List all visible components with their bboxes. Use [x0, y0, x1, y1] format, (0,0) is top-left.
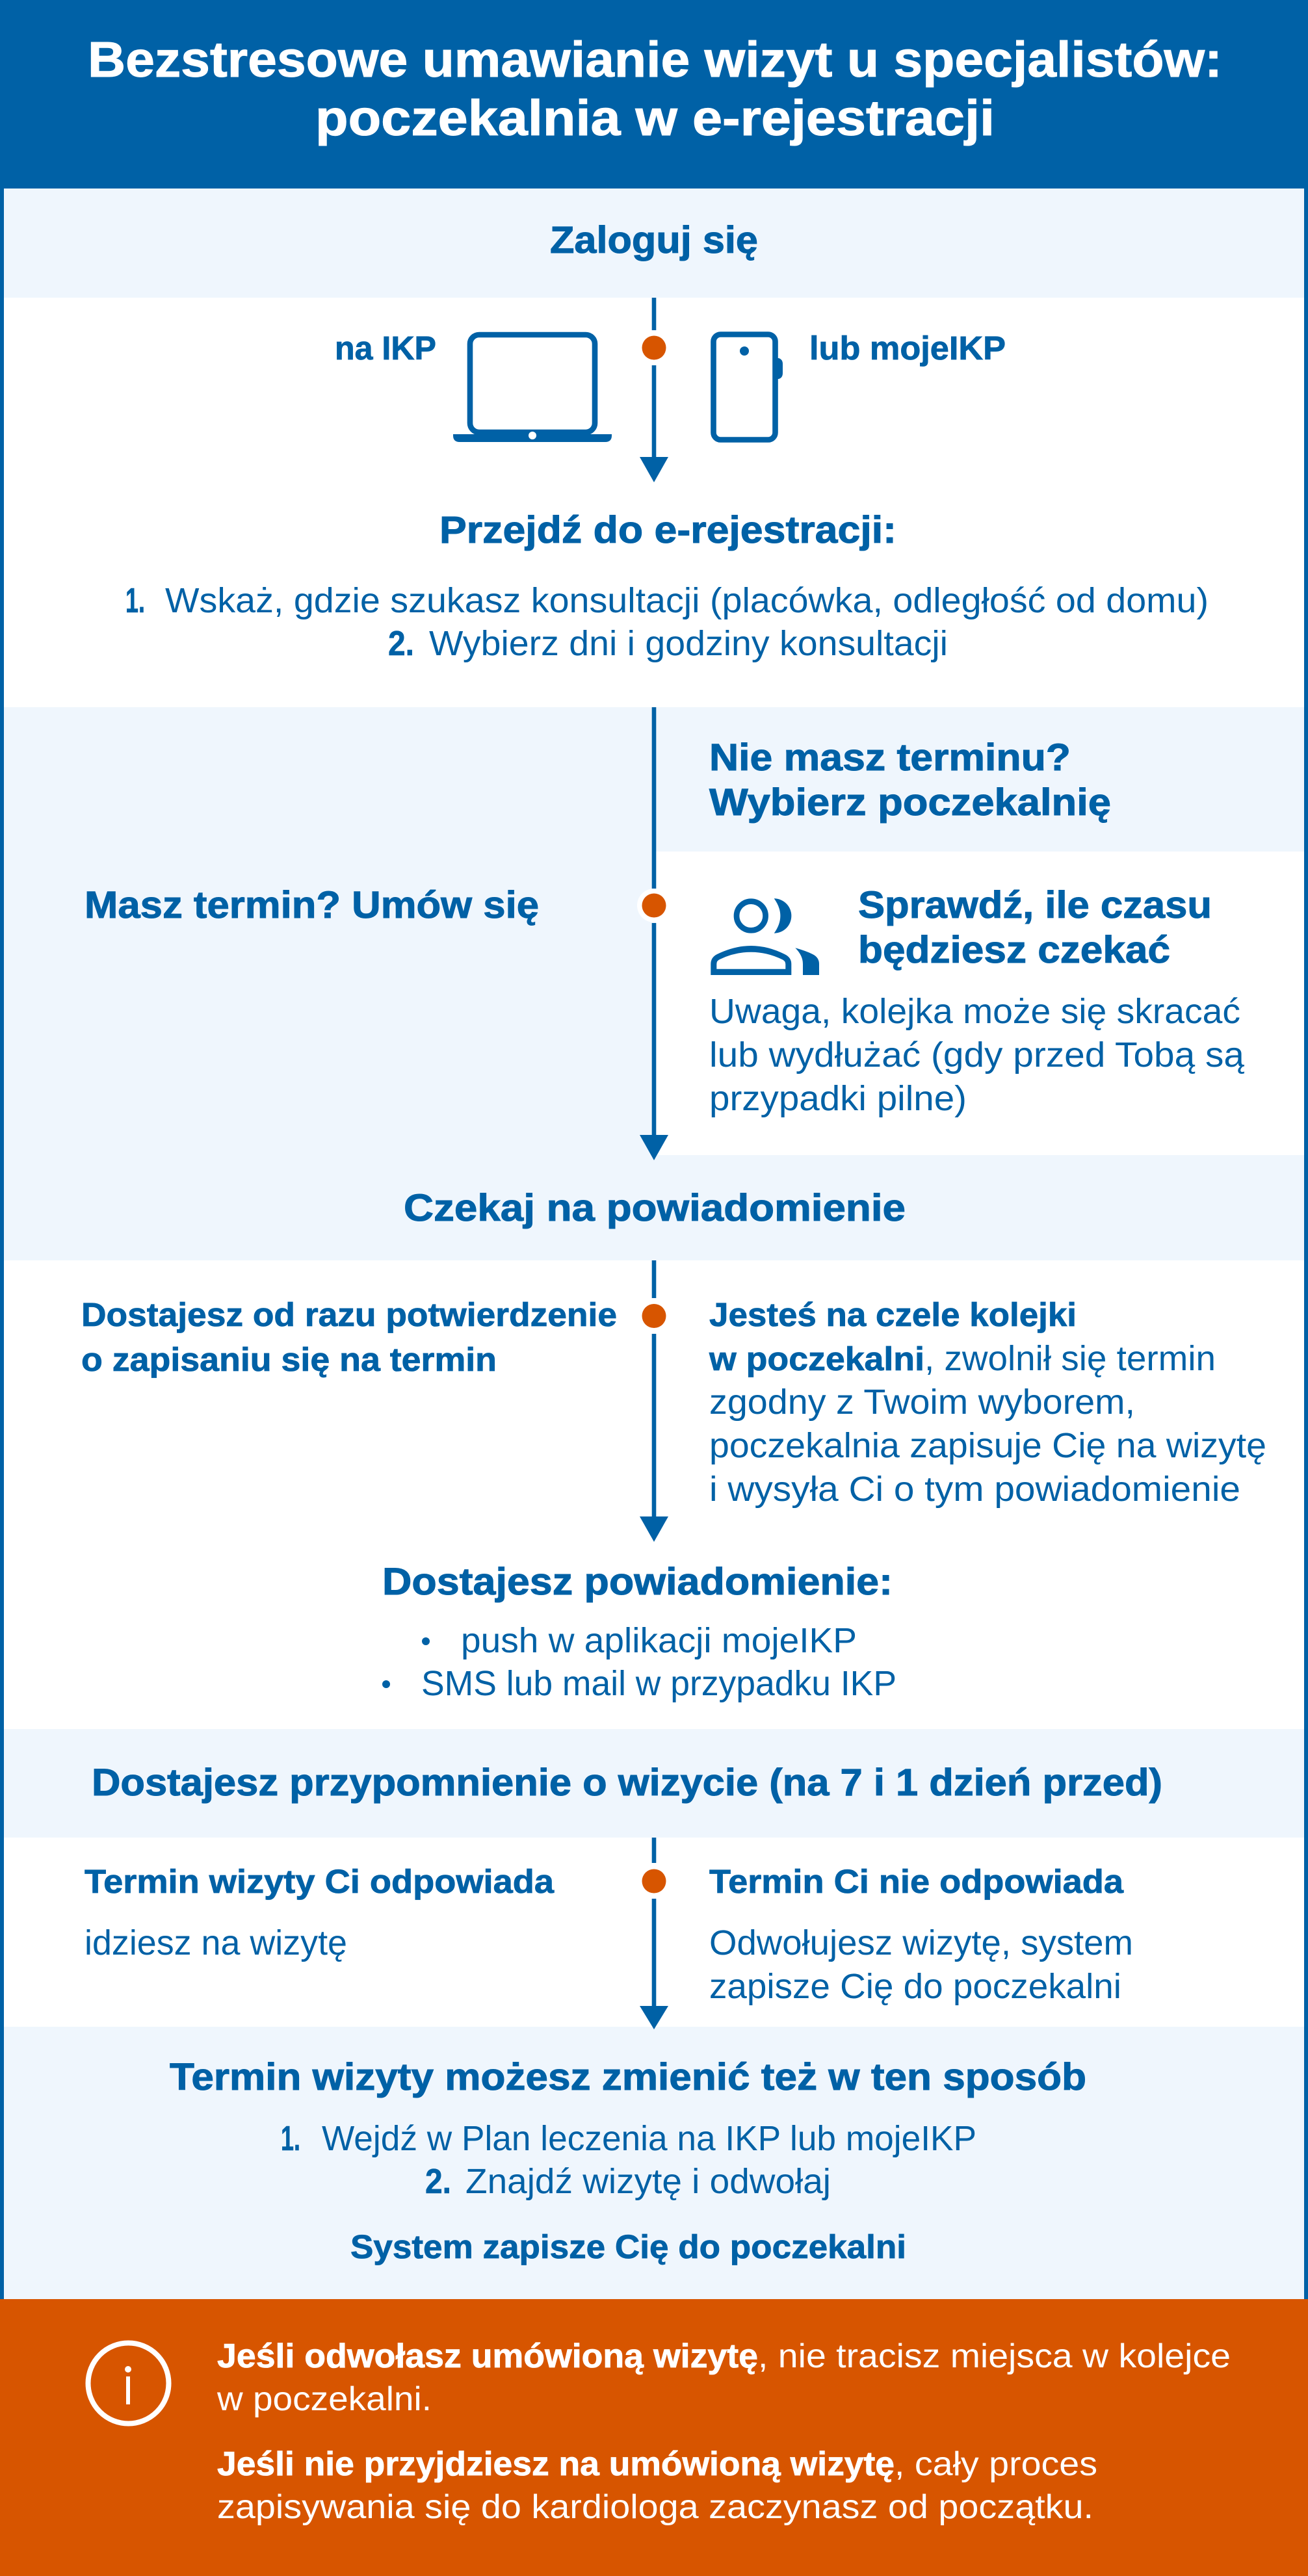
heading: wait for notification: Czekaj na powiadomienie	[404, 1187, 906, 1229]
label: na IKP: na IKP	[335, 330, 436, 367]
numbered list: change steps: Wejdź w Plan leczenia na IKP lub mojeIKP	[322, 2119, 976, 2158]
text: top of queue: w poczekalni	[709, 1340, 924, 1377]
heading: go to e-registration: Przejdź do e-rejestracji:	[439, 509, 896, 551]
text: top of queue: zgodny z Twoim wyborem,	[709, 1383, 1135, 1422]
heading: check waiting time: będziesz czekać	[858, 929, 1170, 971]
label: lub mojeIKP: lub mojeIKP	[809, 330, 1006, 367]
heading: log in: Zaloguj się	[550, 219, 758, 261]
panel: warning	[0, 2299, 1308, 2576]
text: cancelling: , nie tracisz miejsca w kolejce	[758, 2337, 1231, 2375]
text: immediate confirmation	[81, 1296, 617, 1378]
text: not showing up: , cały proces	[895, 2445, 1097, 2483]
flow connector 4	[640, 1838, 668, 2029]
text: immediate confirmation: o zapisaniu się na termin	[81, 1341, 497, 1378]
text: queue note: lub wydłużać (gdy przed Tobą są	[709, 1035, 1245, 1074]
text: top of queue	[709, 1296, 1266, 1509]
numbered list: change steps: 2.	[425, 2162, 451, 2201]
numbered list: registration steps: Wybierz dni i godziny konsultacji	[429, 624, 948, 663]
heading: reminder: Dostajesz przypomnienie o wizycie (na 7 i 1 dzień przed)	[92, 1762, 1162, 1804]
band: reminder	[4, 1729, 1304, 1838]
text: queue note: przypadki pilne)	[709, 1079, 967, 1118]
heading: you get a notification: Dostajesz powiadomienie:	[382, 1561, 893, 1603]
list: notification channels: push w aplikacji mojeIKP	[461, 1621, 857, 1660]
list: notification channels	[382, 1621, 896, 1703]
heading: no date, choose waiting room	[709, 736, 1111, 824]
band: change date	[4, 2027, 1304, 2299]
icon: info	[88, 2343, 169, 2423]
text: top of queue: , zwolnił się termin	[924, 1339, 1216, 1378]
text: top of queue: i wysyła Ci o tym powiadomienie	[709, 1470, 1240, 1509]
column: date suits you: Termin wizyty Ci odpowiada	[85, 1863, 555, 1900]
text: queue note	[709, 992, 1245, 1118]
band: log in	[4, 189, 1304, 298]
text: top of queue: Jesteś na czele kolejki	[709, 1296, 1077, 1333]
flow connector 2	[637, 707, 671, 1160]
column: date suits you: idziesz na wizytę	[85, 1923, 347, 1962]
band: wait for notification	[4, 1155, 1304, 1260]
text: cancelling	[216, 2337, 1231, 2418]
title	[88, 32, 1222, 146]
flow connector 3	[640, 1260, 668, 1542]
text: queue note: Uwaga, kolejka może się skracać	[709, 992, 1240, 1031]
heading: check waiting time	[858, 884, 1212, 971]
column: date does not suit you	[709, 1863, 1133, 2006]
numbered list: registration steps: 2.	[388, 624, 414, 663]
text: cancelling: w poczekalni.	[216, 2380, 432, 2418]
heading: no date, choose waiting room: Nie masz terminu?	[709, 736, 1071, 779]
numbered list: registration steps: Wskaż, gdzie szukasz konsultacji (placówka, odległość od domu)	[165, 581, 1209, 620]
heading: change the date: Termin wizyty możesz zmienić też w ten sposób	[170, 2056, 1086, 2098]
flow connector 1	[640, 298, 668, 482]
text: not showing up: Jeśli nie przyjdziesz na umówioną wizytę	[217, 2445, 895, 2483]
title: poczekalnia w e-rejestracji	[315, 90, 995, 146]
side border right	[1304, 189, 1308, 2299]
side border left	[0, 189, 4, 2299]
panel: header	[0, 0, 1308, 189]
text: not showing up: zapisywania się do kardiologa zaczynasz od początku.	[217, 2488, 1093, 2526]
band: choose appointment	[4, 707, 1304, 1155]
list: notification channels: SMS lub mail w przypadku IKP	[421, 1664, 896, 1703]
icon: people queue	[711, 898, 819, 975]
title: Bezstresowe umawianie wizyt u specjalistów:	[88, 32, 1222, 88]
text: not showing up	[217, 2445, 1097, 2526]
heading: check waiting time: Sprawdź, ile czasu	[858, 884, 1212, 926]
numbered list: change steps: Znajdź wizytę i odwołaj	[465, 2162, 831, 2201]
icon: laptop	[453, 335, 612, 442]
text: cancelling: Jeśli odwołasz umówioną wizytę	[217, 2337, 758, 2375]
numbered list: change steps	[281, 2119, 976, 2201]
heading: no date, choose waiting room: Wybierz poczekalnię	[709, 781, 1111, 824]
column: date does not suit you: Odwołujesz wizytę, system	[709, 1923, 1133, 1962]
column: date does not suit you: Termin Ci nie odpowiada	[709, 1863, 1124, 1900]
icon: phone	[714, 334, 783, 439]
band: waiting-room details	[656, 852, 1304, 1155]
column: date suits you	[85, 1863, 555, 1962]
numbered list: change steps: 1.	[281, 2119, 300, 2158]
numbered list: registration steps	[125, 581, 1209, 663]
numbered list: registration steps: 1.	[125, 581, 145, 620]
text: system adds you to waiting room: System zapisze Cię do poczekalni	[350, 2228, 906, 2265]
text: immediate confirmation: Dostajesz od razu potwierdzenie	[81, 1296, 617, 1333]
column: date does not suit you: zapisze Cię do poczekalni	[709, 1967, 1121, 2006]
text: top of queue: poczekalnia zapisuje Cię na wizytę	[709, 1426, 1266, 1465]
heading: have a date, book: Masz termin? Umów się	[85, 884, 539, 926]
